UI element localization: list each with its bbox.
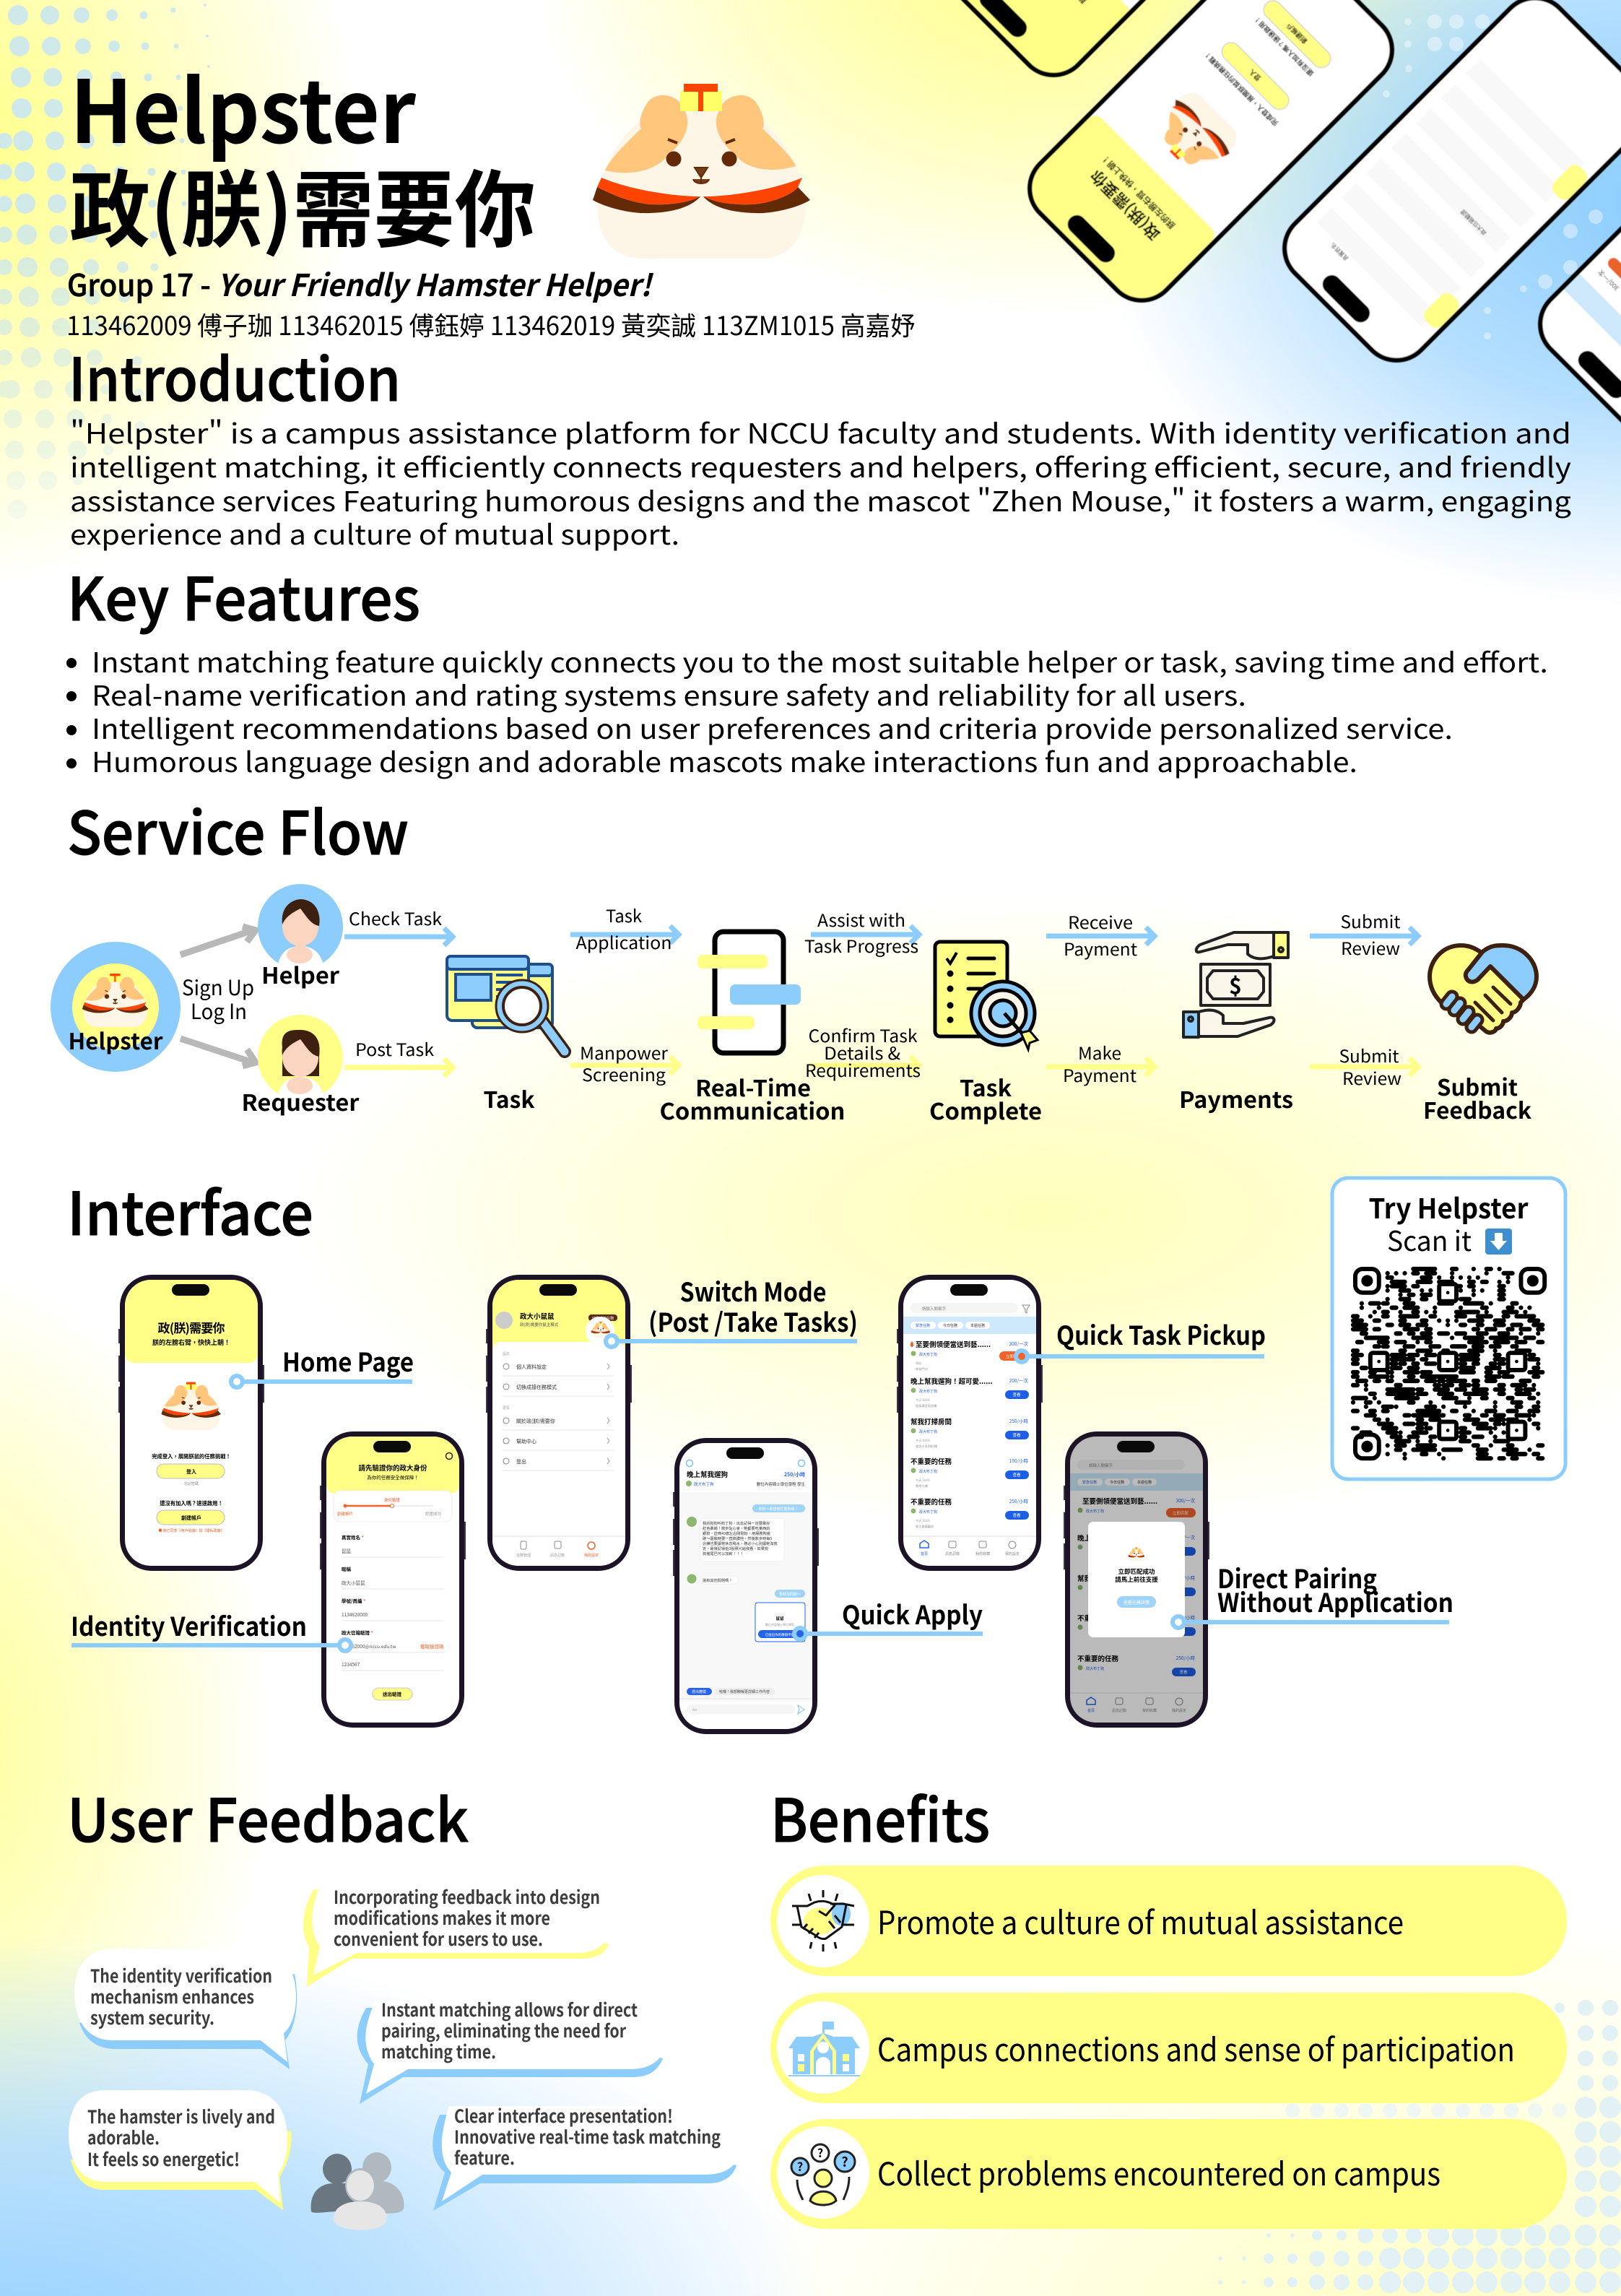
phone: direct pairing modal: 立即匹配 <box>1173 1510 1188 1516</box>
phone: switch mode settings: 切換成接任務模式 <box>516 1384 557 1391</box>
phone: switch mode settings: 切換成接任務 <box>592 1316 614 1321</box>
icon: real-time chat <box>697 932 801 1053</box>
arrow: submit review top <box>1310 908 1418 960</box>
phone: switch mode settings: 我的設定 <box>584 1553 599 1558</box>
phone: task list quick pickup: 查看 <box>1012 1392 1021 1398</box>
phone: identity verification: 113462000@nccu.edu.tw <box>342 1642 396 1650</box>
key features list: Humorous language design and adorable mascots make interactions fun and approachable. <box>92 740 1357 780</box>
phone: task list quick pickup: 訊息記錄 <box>945 1551 960 1556</box>
feedback bubble: identity verification: system security. <box>90 2004 214 2030</box>
phone: chat quick apply: 近，最後記得拍3張照片給我看，如果狗 <box>703 1546 768 1551</box>
feedback bubble: hamster: adorable. <box>87 2124 160 2150</box>
key features list <box>66 641 1548 780</box>
callout: direct pairing: Direct Pairing <box>1217 1559 1377 1596</box>
phone: identity verification: 1134620000 <box>342 1611 368 1618</box>
decorative phone: home page tilted: 創建帳戶 <box>1285 21 1309 46</box>
arrow: assist with task progress <box>804 906 919 958</box>
label: submit feedback <box>1423 1070 1531 1125</box>
phone: direct pairing modal: 首頁 <box>1087 1708 1095 1713</box>
phone: home page: 政(朕)需要你 <box>157 1318 225 1336</box>
phone: chat quick apply: 鼠鼠 <box>775 1616 784 1621</box>
phone: task list quick pickup: 教學大樓 <box>916 1483 928 1489</box>
icon: people with questions: ? <box>841 2152 848 2171</box>
phone: chat quick apply: 還有其他問題嗎！ <box>703 1577 733 1583</box>
label: submit feedback: Feedback <box>1423 1093 1531 1125</box>
label: payments: Payments <box>1179 1082 1293 1114</box>
arrow: submit review bottom: Submit <box>1339 1042 1399 1067</box>
benefit: campus connections <box>770 1993 1567 2103</box>
phone: chat quick apply: 碗～圖裝時要一直搞讚他，然後散步時每5 <box>703 1535 772 1541</box>
phone: chat quick apply: 哈囉！我想瞭解更詳細工作內容 <box>719 1689 770 1694</box>
introduction text: "Helpster" is a campus assistance platform for NCCU faculty and students. With identity verification and <box>70 412 1571 451</box>
phone: direct pairing modal: 不重要的任務 <box>1077 1613 1119 1623</box>
heading: interface: Interface <box>67 1166 313 1252</box>
phone: chat quick apply: 已送出你的應徵申請 <box>765 1632 795 1637</box>
phone: task list quick pickup: 今天 18:00 <box>916 1478 930 1483</box>
service flow diagram <box>51 884 1537 1126</box>
icon: people with questions <box>791 2144 855 2205</box>
phone: direct pairing modal: 訊息記錄 <box>1112 1708 1126 1713</box>
benefit: mutual assistance <box>770 1866 1567 1976</box>
phone: direct pairing modal: 250/小時 <box>1176 1574 1195 1581</box>
phone: chat quick apply: 晚上幫我遛狗 <box>687 1469 728 1479</box>
label: submit feedback: Submit <box>1437 1070 1518 1102</box>
phone: identity verification: 1234567 <box>342 1660 360 1668</box>
team members: 113462009 傅子珈 113462015 傅鈺婷 113462019 黃奕誠 113ZM1015 高嘉妤 <box>66 306 916 343</box>
feedback bubble: hamster <box>69 2090 292 2210</box>
phone: direct pairing modal: 政大布丁狗 <box>1086 1509 1104 1514</box>
phone: task list quick pickup: 政大十舍B棟3樓 <box>916 1444 937 1449</box>
phone: task list quick pickup: 政大會議廳前 <box>916 1524 934 1529</box>
feedback bubble: instant matching: Instant matching allows for direct <box>381 1996 638 2022</box>
phone: identity verification: 鼠鼠 <box>342 1547 351 1554</box>
decorative phone: home page tilted <box>1027 0 1395 303</box>
title: Helpster <box>70 43 417 168</box>
introduction text: intelligent matching, it efficiently connects requesters and helpers, offering efficient, secure, and friendly <box>70 446 1571 485</box>
phone: task list quick pickup: 250/小時 <box>1009 1417 1028 1424</box>
phone: identity verification: 真實姓名 * <box>342 1533 364 1541</box>
phone: chat quick apply: 分鐘也要讓牠休息喝水，務必小心別讓牠淘氣 <box>703 1541 778 1546</box>
phone: switch mode settings: 設定 <box>503 1351 510 1356</box>
arrow: submit review top: Review <box>1341 935 1400 960</box>
phone: chat quick apply: 紅色牽繩！散步貼心會，牠都要吃東西的 <box>703 1525 770 1531</box>
arrow: confirm task details: Details & <box>824 1039 900 1065</box>
phone: identity verification: 身份驗證 <box>384 1497 400 1503</box>
phone: chat quick apply: 暫時沒問題～ <box>779 1592 801 1597</box>
phone: direct pairing modal: 緊急任務 <box>1082 1480 1097 1485</box>
phone: direct pairing modal <box>1064 1431 1209 1728</box>
arrow: receive payment: Payment <box>1064 935 1137 961</box>
phone: direct pairing modal: 200/一次 <box>1176 1533 1195 1541</box>
node: helper: Helper <box>261 958 340 990</box>
phone: home page: 登入 <box>186 1468 196 1476</box>
feedback bubble: clear interface: feature. <box>454 2144 515 2170</box>
arrow: manpower screening: Manpower <box>580 1039 669 1065</box>
decorative phone: task list tilted: 300/一次 <box>1596 268 1621 293</box>
icon: down arrow <box>1485 1229 1512 1255</box>
decorative phone: form tilted: 真實姓名 <box>1329 241 1350 262</box>
heading: user feedback: User Feedback <box>67 1773 469 1859</box>
arrow: manpower screening: Screening <box>582 1061 666 1086</box>
phone: identity verification: 學號/員編 * <box>342 1597 365 1604</box>
phone: identity verification: 認證成功 <box>425 1511 441 1517</box>
text: campus connections: Campus connections and sense of participation <box>877 2024 1515 2071</box>
phone: identity verification: 為你的任務安全做保障！ <box>367 1473 419 1481</box>
icon: user group <box>311 2152 404 2230</box>
phone: chat quick apply: 送出應徵 <box>692 1689 706 1694</box>
phone: switch mode settings: 政大小鼠鼠 <box>520 1311 555 1321</box>
phone: switch mode settings: 更多 <box>503 1405 510 1411</box>
qr code <box>1353 1269 1544 1458</box>
label: real-time communication <box>660 1070 845 1126</box>
phone: chat quick apply: 數位內容碩士學位學程 <box>765 1622 794 1627</box>
heading: key features: Key Features <box>67 552 420 638</box>
phone: chat quick apply: 數位內容碩士學位學程 學生 <box>757 1481 805 1487</box>
arrow: task application: Application <box>576 929 672 954</box>
arrow: check task <box>344 905 453 945</box>
panel: try helpster qr code <box>1332 1178 1565 1479</box>
phone: identity verification: 獲取驗證碼 <box>420 1642 444 1650</box>
arrows: sign up split <box>181 927 256 1066</box>
label: task complete <box>929 1070 1042 1126</box>
phone: chat quick apply: 250/小時 <box>784 1471 805 1478</box>
node: helpster <box>51 942 181 1072</box>
phone: direct pairing modal: 本週任務 <box>1137 1480 1152 1485</box>
decorative phone: task list tilted <box>1537 225 1621 423</box>
decorative phone: home page tilted: 朕的左膀右臂，快快上朝！ <box>1099 152 1178 231</box>
phone: direct pairing modal: 300/一次 <box>1176 1496 1195 1504</box>
introduction text <box>70 412 1571 553</box>
feedback bubble: instant matching: pairing, eliminating the need for <box>381 2017 626 2043</box>
label: sign up log in: Log In <box>191 995 247 1026</box>
arrow: post task: Post Task <box>355 1036 434 1061</box>
phone: identity verification: 政大小鼠鼠 <box>342 1579 365 1586</box>
feedback bubble: hamster: It feels so energetic! <box>87 2146 240 2172</box>
callout: direct pairing <box>1173 1559 1453 1628</box>
phone: task list quick pickup: 查看 <box>1012 1432 1021 1438</box>
icon: task complete target <box>935 942 1038 1049</box>
arrow: make payment: Payment <box>1063 1062 1137 1087</box>
label: task complete: Complete <box>929 1093 1042 1126</box>
halftone dots bottom right <box>1220 2008 1610 2282</box>
phone: task list quick pickup: 請輸入關鍵字 <box>922 1306 947 1312</box>
key features list: Intelligent recommendations based on user preferences and criteria provide personalized service. <box>92 707 1453 747</box>
phone: home page: ● 我已同意《用戶協議》與《隱私政策》 <box>158 1528 225 1533</box>
decorative phone: home page tilted: 完成登入，展開朕鼠的任務挑戰！ <box>1201 50 1280 129</box>
phone: task list quick pickup: 今天 18:00 <box>916 1438 930 1443</box>
arrow: submit review bottom <box>1310 1042 1418 1090</box>
introduction text: experience and a culture of mutual support. <box>70 513 679 553</box>
node: requester: Requester <box>241 1085 360 1117</box>
decorative phone: form tilted <box>1267 0 1621 378</box>
phone: switch mode settings: 任務管理 <box>516 1553 531 1558</box>
arrow: post task <box>344 1036 453 1076</box>
phone: chat quick apply: 銀狗，這條40歲左右剛剛好，用服務陶瓷 <box>703 1530 770 1536</box>
arrow: submit review top: Submit <box>1340 908 1401 933</box>
phone: identity verification <box>320 1431 466 1728</box>
halftone dots top left <box>4 5 213 509</box>
decorative phone: home page tilted: 登入 <box>1247 67 1263 83</box>
phone: task list quick pickup: 300/一次 <box>1009 1340 1028 1347</box>
subtitle: Group 17 - Your Friendly Hamster Helper! <box>67 261 653 306</box>
phone: direct pairing modal: 不重要的任務 <box>1077 1653 1119 1663</box>
phone: task list quick pickup: 不重要的任務 <box>911 1456 952 1466</box>
callout: home page: Home Page <box>282 1342 414 1379</box>
arrow: assist with task progress: Assist with <box>817 906 905 932</box>
feedback bubble: design modifications: Incorporating feedback into design <box>334 1884 600 1910</box>
phone: switch mode settings: 登出 <box>516 1458 526 1465</box>
introduction text: assistance services Featuring humorous designs and the mascot "Zhen Mouse," it fosters a warm, engaging <box>70 480 1571 519</box>
phone: task list quick pickup: 政大布丁狗 <box>919 1509 937 1515</box>
label: task complete: Task <box>960 1070 1012 1103</box>
phone: task list quick pickup: 政大布丁狗 <box>919 1389 937 1394</box>
callout: switch mode <box>606 1272 858 1347</box>
phone: direct pairing modal: 至要側領便當送到藝...... <box>1082 1496 1157 1506</box>
phone: task list quick pickup: 今日任務 <box>943 1323 957 1328</box>
node: requester <box>241 1015 360 1117</box>
arrow: manpower screening <box>570 1039 679 1086</box>
arrow: task application: Task <box>606 902 642 927</box>
feedback bubble: clear interface: Innovative real-time task matching <box>454 2123 721 2149</box>
phone: switch mode settings: 關於政(朕)需要你 <box>516 1418 555 1425</box>
title: 政(朕)需要你 <box>69 143 536 264</box>
node: helpster: Helpster <box>68 1023 163 1056</box>
arrow: make payment <box>1046 1039 1155 1087</box>
halftone dots top right <box>1386 22 1596 336</box>
phone: task list quick pickup: 道德講堂宿舍樓 <box>916 1403 936 1408</box>
phone: task list quick pickup: 今天 18:00 <box>916 1398 930 1403</box>
icon: task search <box>447 956 565 1052</box>
text: scan it: Scan it <box>1387 1219 1472 1259</box>
phone: home page: 完成登入，展開朕鼠的任務挑戰！ <box>152 1453 231 1460</box>
arrow: check task: Check Task <box>349 905 442 930</box>
phone: task list quick pickup: 本週任務 <box>970 1323 985 1328</box>
phone: direct pairing modal: 190/小時 <box>1176 1613 1195 1621</box>
feedback bubble: design modifications: modifications makes it more <box>334 1905 550 1931</box>
arrow: assist with task progress: Task Progress <box>804 932 918 958</box>
phone: task list quick pickup: 立即匹配 <box>1006 1353 1022 1359</box>
heading: try helpster: Try Helpster <box>1369 1187 1529 1226</box>
key features list: Instant matching feature quickly connects you to the most suitable helper or task, saving time and effort. <box>92 641 1548 680</box>
feedback bubble: instant matching: matching time. <box>381 2038 496 2064</box>
arrow: confirm task details <box>805 1022 921 1082</box>
label: sign up log in <box>182 971 254 1026</box>
feedback bubble: instant matching <box>357 1996 664 2104</box>
benefit: collect problems <box>770 2119 1567 2229</box>
phone: switch mode settings: 幫助中心 <box>516 1438 536 1445</box>
feedback bubble: identity verification <box>74 1949 297 2069</box>
label: real-time communication: Real-Time <box>695 1070 811 1103</box>
phone: task list quick pickup <box>897 1275 1043 1571</box>
callout: quick apply <box>794 1595 983 1639</box>
label: sign up log in: Sign Up <box>182 971 254 1002</box>
arrow: confirm task details: Requirements <box>805 1057 921 1082</box>
phone: home page: 朕的左膀右臂，快快上朝！ <box>152 1338 230 1347</box>
phone: task list quick pickup: 幫我打掃房間 <box>911 1416 952 1426</box>
icon: people with questions: ? <box>797 2157 803 2175</box>
icon: handshake <box>792 1890 854 1951</box>
feedback bubble: identity verification: The identity verification <box>90 1962 272 1988</box>
phone: direct pairing modal: 今日任務 <box>1110 1480 1124 1485</box>
phone: direct pairing modal: 查看 <box>1179 1669 1188 1675</box>
arrow: confirm task details: Confirm Task <box>809 1022 917 1047</box>
text: mutual assistance: Promote a culture of mutual assistance <box>877 1897 1404 1944</box>
phone: task list quick pickup: 今天 18:00 <box>916 1518 930 1523</box>
arrow: receive payment <box>1046 909 1155 961</box>
phone: identity verification: 政大信箱驗證 * <box>342 1629 373 1636</box>
phone: identity verification: 暱稱 <box>342 1565 351 1572</box>
phone: chat quick apply <box>673 1438 819 1734</box>
phone: task list quick pickup: 查看 <box>1012 1512 1021 1518</box>
feedback bubble: hamster: The hamster is lively and <box>87 2103 275 2129</box>
phone: home page: 忘記密碼 <box>184 1481 199 1486</box>
decorative phone: home page tilted: 政(朕)需要你 <box>1085 165 1165 245</box>
phone: switch mode settings: 政(朕)需要你鼠主模式 <box>520 1322 559 1327</box>
node: helper <box>258 884 343 990</box>
phone: direct pairing modal: 查看任務詳情 <box>1124 1599 1150 1606</box>
phone: task list quick pickup: 首頁 <box>921 1551 928 1556</box>
phone: task list quick pickup: 190/小時 <box>1009 1457 1028 1464</box>
feedback bubble: identity verification: mechanism enhances <box>90 1983 254 2009</box>
phone: direct pairing modal: 250/小時 <box>1176 1654 1195 1661</box>
phone: direct pairing modal: 晚上幫我遛狗！超可愛...... <box>1077 1533 1160 1543</box>
icon: people with questions: ? <box>817 2144 823 2161</box>
heading: service flow: Service Flow <box>67 786 409 872</box>
heading: introduction: Introduction <box>69 332 401 418</box>
feedback bubble: clear interface: Clear interface presentation! <box>454 2102 673 2128</box>
decorative phone: form tilted: 政大信箱驗證 <box>1459 207 1488 237</box>
phone: direct pairing modal: 政大布丁狗 <box>1086 1666 1104 1671</box>
callout: quick task pickup: Quick Task Pickup <box>1056 1315 1266 1353</box>
phone: task list quick pickup: 晚上幫我遛狗！超可愛...... <box>911 1376 993 1386</box>
phone: direct pairing modal: 我的設定 <box>1172 1708 1186 1713</box>
phone: task list quick pickup: 查看 <box>1012 1472 1021 1478</box>
phone: task list quick pickup: 我的收藏 <box>975 1551 990 1556</box>
phone: home page <box>118 1275 264 1571</box>
phone: task list quick pickup: 緊急任務 <box>916 1323 930 1328</box>
phone: direct pairing modal: 立即匹配成功 <box>1118 1567 1155 1576</box>
feedback bubble: clear interface <box>433 2102 739 2211</box>
label: real-time communication: Communication <box>660 1093 845 1126</box>
phone: chat quick apply: 政大布丁狗 <box>694 1481 714 1487</box>
callout: switch mode: Switch Mode <box>680 1272 826 1309</box>
heading: benefits: Benefits <box>770 1773 990 1859</box>
callout: quick apply: Quick Apply <box>842 1595 983 1632</box>
phone: task list quick pickup: 我的設定 <box>1005 1551 1020 1556</box>
mascot: hamster <box>588 79 816 264</box>
phone: chat quick apply: 我的狗狗叫布丁狗，出去記得一定要牽好 <box>703 1520 770 1526</box>
phone: task list quick pickup: 現在 <box>916 1361 921 1366</box>
callout: home page <box>231 1342 414 1387</box>
phone: identity verification: 請先驗證你的政大身份 <box>358 1463 427 1473</box>
phone: direct pairing modal: 請馬上前往支援 <box>1115 1575 1158 1584</box>
phone: home page: 還沒有加入嗎？速速啟用！ <box>160 1500 223 1507</box>
label: task: Task <box>484 1082 535 1114</box>
phone: task list quick pickup: 政大布丁狗 <box>919 1352 937 1357</box>
phone: switch mode settings: 訊息記錄 <box>550 1553 565 1558</box>
phone: chat quick apply: Aa <box>692 1707 697 1712</box>
phone: chat quick apply: 你好～我想幫忙遛狗喔！ <box>758 1507 799 1512</box>
phone: switch mode settings <box>486 1275 632 1573</box>
phone: task list quick pickup: 政大布丁狗 <box>919 1469 937 1474</box>
phone: direct pairing modal: 我的收藏 <box>1142 1708 1157 1713</box>
phone: home page: 創建帳戶 <box>181 1515 201 1522</box>
icon: handshake heart <box>1430 945 1537 1033</box>
decorative phone: home page tilted: 還沒有加入嗎？速速啟用！ <box>1251 14 1316 79</box>
title <box>69 43 536 264</box>
phone: task list quick pickup: 不重要的任務 <box>911 1496 952 1507</box>
icon: payments: $ <box>1229 969 1242 1000</box>
phone: task list quick pickup: 200/一次 <box>1009 1377 1028 1384</box>
phone: task list quick pickup: 至要側領便當送到藝...... <box>916 1339 991 1349</box>
phone: task list quick pickup: 後側門口 <box>916 1366 928 1372</box>
text: collect problems: Collect problems encountered on campus <box>877 2149 1440 2195</box>
key features list: Real-name verification and rating systems ensure safety and reliability for all users. <box>92 674 1246 714</box>
icon: school <box>788 2022 860 2076</box>
callout: identity verification: Identity Verification <box>71 1606 307 1644</box>
callout: switch mode: (Post /Take Tasks) <box>648 1302 858 1340</box>
arrow: task application <box>570 902 679 954</box>
phone: direct pairing modal: 幫我打掃房間 <box>1077 1573 1118 1583</box>
decorative phone: partial top left <box>960 0 1147 78</box>
callout: quick task pickup <box>1016 1315 1266 1362</box>
phone: task list quick pickup: 250/小時 <box>1009 1497 1028 1504</box>
arrow: receive payment: Receive <box>1068 909 1133 934</box>
arrow: submit review bottom: Review <box>1342 1065 1401 1090</box>
feedback bubble: design modifications: convenient for users to use. <box>334 1925 543 1951</box>
icon: payments <box>1183 932 1288 1037</box>
feedback bubble: design modifications <box>303 1878 610 1987</box>
phone: identity verification: 創建帳戶 <box>337 1511 353 1517</box>
phone: switch mode settings: 個人資料設定 <box>516 1364 547 1371</box>
phone: direct pairing modal: 請輸入關鍵字 <box>1089 1463 1113 1468</box>
phone: chat quick apply: 狗搖尾巴可以加薪！！！ <box>703 1551 744 1556</box>
arrow: make payment: Make <box>1078 1039 1121 1065</box>
phone: task list quick pickup: 政大布丁狗 <box>919 1429 937 1434</box>
phone: identity verification: 送出驗證 <box>383 1690 401 1697</box>
callout: direct pairing: Without Application <box>1217 1582 1453 1620</box>
